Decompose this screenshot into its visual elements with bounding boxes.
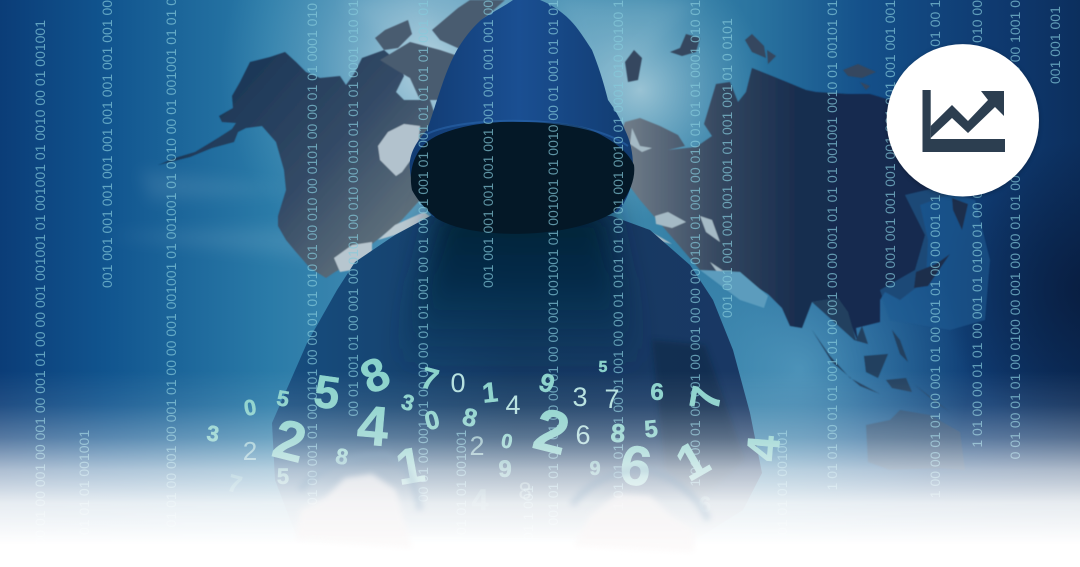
- binary code columns: 01 01 01 001001: [76, 430, 92, 535]
- figure: right sleeve shadow: [652, 340, 745, 500]
- falling numbers: 6: [699, 492, 711, 517]
- binary code columns: 001 01 01 01 01 00 00 01 00 00 001 001001 01 001001 01 0010 00 01 001 01 01 01: [545, 0, 561, 526]
- binary code columns: 01 01 01 001001: [453, 430, 469, 535]
- map: Indochina: [812, 298, 868, 344]
- falling numbers: 5: [277, 464, 289, 489]
- falling numbers: 6: [616, 432, 656, 499]
- binary code columns: 00 01 00 001 01 00 00 00 01 01 001 00 01 00 01 001 01 001 01 01 01 01 001 01: [415, 0, 431, 502]
- falling numbers: 7: [604, 384, 620, 414]
- falling numbers: 2: [469, 431, 485, 461]
- falling numbers: 4: [505, 390, 521, 420]
- falling numbers: 6: [650, 379, 664, 406]
- falling numbers: 1: [666, 430, 719, 492]
- sleeve cuffs: [300, 455, 708, 520]
- map: Australia: [866, 410, 965, 470]
- binary code columns: 00 01 001 01 00 001 00 0101 00 010 00 010 01 01 01 0001 010 01: [345, 0, 361, 416]
- figure: hood seam: [427, 121, 628, 146]
- binary code columns: 00 01 00 001 00 001 00 001 01 00 00 001 001001 01 001001 01 0010 00 01 001001: [32, 20, 48, 546]
- falling numbers: 9: [535, 366, 559, 400]
- map: Gulf of Mexico: [334, 242, 372, 272]
- falling numbers: 9: [589, 458, 601, 480]
- hand: left: [296, 474, 412, 548]
- falling numbers: 1: [392, 436, 429, 496]
- map: Africa: [700, 270, 768, 308]
- map: North America: [158, 50, 440, 278]
- binary code columns: 01 01 00 001 00 001 01 00 00 001 001001 01 001001 01 0010 00 01 001001 01 01 0: [163, 0, 179, 527]
- map: Asia and Europe: [610, 68, 962, 342]
- map: Arctic islands right: [625, 34, 876, 90]
- hand: right: [574, 494, 694, 552]
- falling numbers: 8: [518, 478, 532, 505]
- figure: face opening: [411, 122, 634, 234]
- falling numbers: 9: [498, 456, 512, 483]
- falling numbers: 0: [421, 404, 443, 436]
- binary code columns: 001 001 001 001 001 001 01 001 001 01 0 0101: [719, 18, 735, 318]
- falling numbers: 3: [399, 389, 417, 416]
- falling numbers: 5: [643, 415, 659, 444]
- binary code columns: 1 00 00 01 01 00 001 01 00 001 01 00 00 001 01 00 01 01 010 01 00 01 01 00 1: [927, 0, 943, 498]
- map: Indonesia: [812, 330, 950, 412]
- falling numbers: 4: [355, 393, 391, 458]
- binary code columns: 01 00 001 01 00 0101 00 00 01 01 010 01 00 010 00 0101 00 00 01 01 0001 010: [304, 3, 320, 505]
- map: Hudson Bay: [378, 124, 420, 176]
- falling numbers: 8: [352, 346, 398, 404]
- world map: [158, 0, 990, 470]
- badge circle: [887, 44, 1039, 196]
- hands on keyboard: [296, 455, 708, 552]
- figure: chest shadow: [400, 205, 640, 370]
- falling numbers: 7: [225, 470, 245, 499]
- falling numbers: 5: [599, 359, 608, 376]
- white fade at bottom: [0, 370, 1080, 567]
- figure: body and sleeves: [272, 215, 762, 540]
- map: inland seas: [630, 128, 732, 280]
- falling numbers: 0: [242, 394, 258, 421]
- falling numbers: 0: [450, 368, 466, 398]
- falling numbers: [205, 346, 790, 517]
- falling numbers: 8: [459, 403, 480, 433]
- map: Japan and Korea: [914, 198, 968, 288]
- falling numbers: 0: [499, 430, 514, 454]
- falling numbers: 5: [275, 385, 291, 412]
- icon: rising arrow: [931, 91, 1004, 138]
- hooded figure: [272, 0, 762, 540]
- falling numbers: 4: [472, 484, 489, 517]
- binary code columns: 001 001 001: [1047, 6, 1063, 84]
- falling numbers: 5: [311, 364, 343, 420]
- chart icon: [922, 90, 1005, 152]
- map: Atlantic sliver: [378, 212, 432, 240]
- icon: axes: [922, 90, 1005, 152]
- binary code columns: 0 01 00 01 01 00 0100 00 001 00 00 01 01 00 00 1 00 010 01 0 00 1001 0: [1007, 0, 1023, 459]
- falling numbers: 6: [575, 420, 591, 450]
- falling numbers: 3: [205, 420, 221, 447]
- binary code columns: 01 1 001: [520, 485, 536, 540]
- binary code columns: 01 01 01 001001: [774, 430, 790, 535]
- falling numbers: 8: [334, 443, 350, 470]
- falling numbers: 1: [481, 376, 499, 409]
- falling numbers: 8: [609, 417, 627, 449]
- falling numbers: 7: [680, 383, 731, 414]
- map: Greenland and Arctic islands: [375, 0, 505, 100]
- icon badge: rising line chart: [887, 44, 1039, 196]
- falling numbers: 2: [267, 406, 313, 475]
- binary code columns: 1 01 01 00 01 01 001 01 00 001 00 00 001 01 01 01 001001 0010 01 00101 01: [824, 0, 840, 490]
- figure: hood: [410, 0, 633, 217]
- falling numbers: 2: [527, 395, 576, 468]
- falling numbers: 7: [417, 361, 442, 398]
- falling numbers: 2: [243, 436, 257, 466]
- binary code columns: 1 01 01 01 001 00 01 001 00 00 01 0101 01 00 01 001 0010 01 0001 010 00100 1: [610, 0, 626, 510]
- binary code columns: 1 01 00 00 01 01 00 001 01 0100 01 00 001 00 1 00 00 01 01 00 010 00: [969, 0, 985, 448]
- falling numbers: 3: [572, 382, 588, 412]
- map: Southeast Asia shallows: [880, 188, 990, 330]
- binary code columns: 1 01 00 01 00 001 00 001 00 00 00 0101 01 001 00 010 01 01 01 0001 010 01: [687, 0, 703, 487]
- falling numbers: 4: [736, 433, 790, 463]
